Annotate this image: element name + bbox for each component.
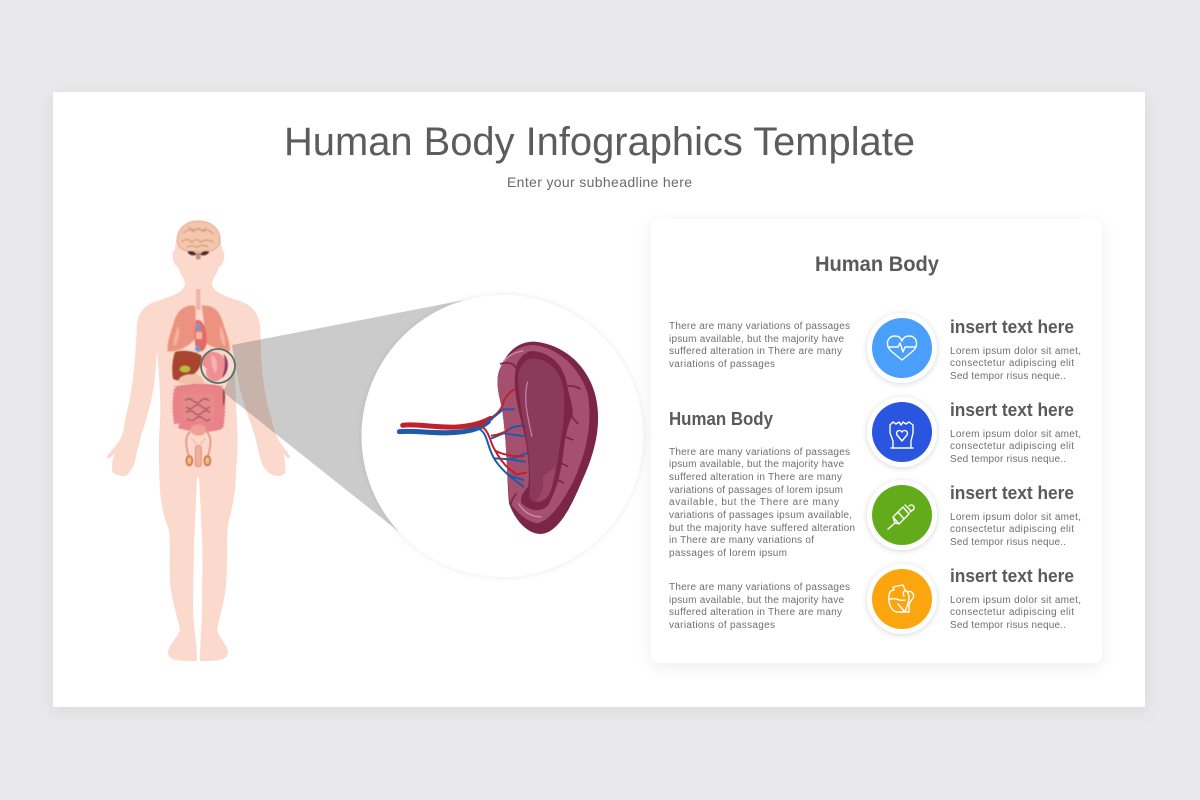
left text block 2: There are many variations of passages xyxy=(669,447,850,458)
list item 1 text: insert text here xyxy=(950,317,1074,337)
panel: human body info xyxy=(651,219,1102,663)
blood vessels xyxy=(399,389,527,487)
small intestine xyxy=(180,392,218,425)
heart and vessels xyxy=(194,320,207,383)
icon: hands holding heart xyxy=(867,397,937,467)
list item 1 text xyxy=(950,317,1081,382)
list item 3 text: consectetur adipiscing elit xyxy=(950,524,1074,535)
left text block 1 xyxy=(669,321,850,370)
brain xyxy=(177,221,220,259)
zoomed spleen circle xyxy=(362,295,644,577)
list item 4 text: Sed tempor risus neque.. xyxy=(950,620,1066,631)
slide background card xyxy=(53,92,1145,707)
left text block 3: There are many variations of passages xyxy=(669,582,850,593)
left heading: Human Body xyxy=(669,409,773,429)
gallbladder xyxy=(180,366,190,372)
icon: bottle and heart xyxy=(867,564,937,634)
liver xyxy=(172,351,202,380)
lungs xyxy=(168,305,230,352)
subtitle: Enter your subheadline here xyxy=(507,174,692,190)
left text block 2: but the majority have suffered alteration xyxy=(669,523,855,534)
left text block 3: suffered alteration in There are many xyxy=(669,607,842,618)
stomach xyxy=(201,352,226,382)
human body figure xyxy=(107,221,290,661)
left text block 2: passages of lorem ipsum xyxy=(669,548,787,559)
list item 2 text: insert text here xyxy=(950,400,1074,420)
highlight ring on spleen xyxy=(201,349,235,383)
left text block 2: variations of passages of lorem ipsum xyxy=(669,485,843,496)
list item 4 text xyxy=(950,566,1081,631)
list item 4 text: Lorem ipsum dolor sit amet, xyxy=(950,595,1081,606)
icon: syringe xyxy=(867,480,937,550)
list item 2 text: Lorem ipsum dolor sit amet, xyxy=(950,429,1081,440)
list item 3 text: insert text here xyxy=(950,483,1074,503)
left text block 2: available, but the There are many xyxy=(669,497,839,508)
left text block 2: suffered alteration in There are many xyxy=(669,472,842,483)
list item 1 text: Sed tempor risus neque.. xyxy=(950,371,1066,382)
spleen illustration xyxy=(399,342,598,534)
spleen in body xyxy=(222,354,228,378)
left text block 1: There are many variations of passages xyxy=(669,321,850,332)
list item 3 text: Lorem ipsum dolor sit amet, xyxy=(950,512,1081,523)
icon: heart pulse xyxy=(867,313,937,383)
left text block 1: variations of passages xyxy=(669,359,775,370)
list item 2 text: Sed tempor risus neque.. xyxy=(950,454,1066,465)
list item 4 text: insert text here xyxy=(950,566,1074,586)
magnifier beam xyxy=(223,297,502,535)
body silhouette xyxy=(107,221,290,661)
list item 2 text: consectetur adipiscing elit xyxy=(950,441,1074,452)
title: Human Body Infographics Template xyxy=(284,120,915,164)
list item 1 text: consectetur adipiscing elit xyxy=(950,358,1074,369)
large intestine xyxy=(178,389,220,427)
list item 2 text xyxy=(950,400,1081,465)
list item 4 text: consectetur adipiscing elit xyxy=(950,607,1074,618)
dark colon edge xyxy=(223,388,225,407)
left text block 1: ipsum available, but the majority have xyxy=(669,334,844,345)
list item 3 text xyxy=(950,483,1081,548)
left text block 2: variations of passages ipsum available, xyxy=(669,510,852,521)
left text block 3: ipsum available, but the majority have xyxy=(669,595,844,606)
left text block 2: ipsum available, but the majority have xyxy=(669,459,844,470)
list item 1 text: Lorem ipsum dolor sit amet, xyxy=(950,346,1081,357)
left text block 2: in There are many variations of xyxy=(669,535,814,546)
pancreas and kidneys xyxy=(178,374,205,385)
list item 3 text: Sed tempor risus neque.. xyxy=(950,537,1066,548)
pelvic organs xyxy=(186,424,211,467)
left text block 1: suffered alteration in There are many xyxy=(669,346,842,357)
left text block 2 xyxy=(669,447,855,559)
panel heading: Human Body xyxy=(815,253,939,276)
trachea xyxy=(192,289,205,310)
left text block 3: variations of passages xyxy=(669,620,775,631)
left text block 3 xyxy=(669,582,850,631)
